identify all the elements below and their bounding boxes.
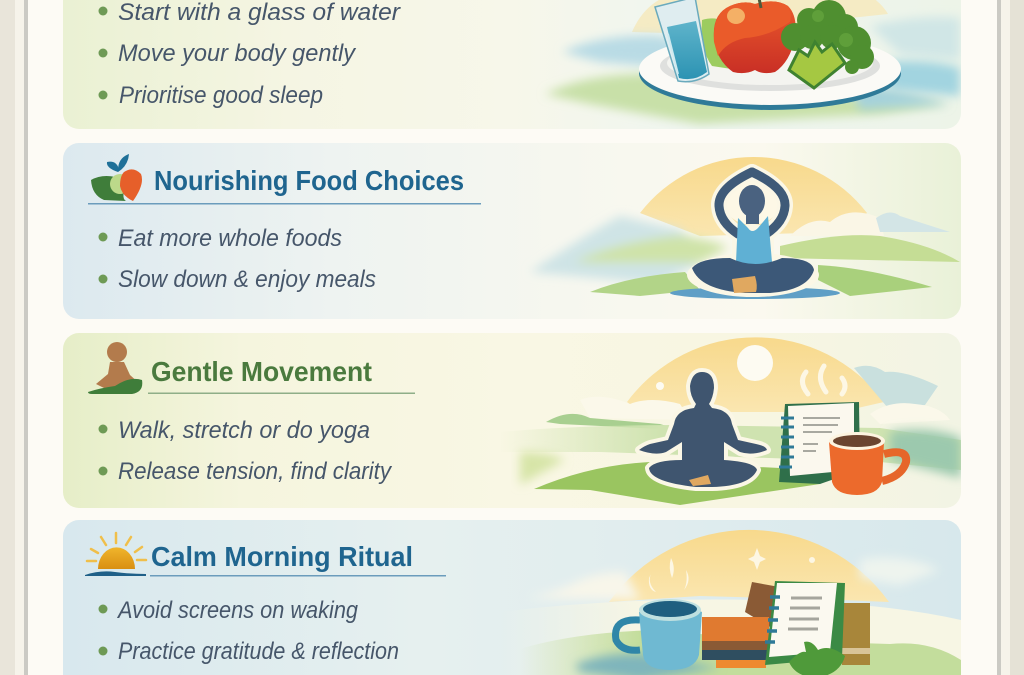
- panel: hydration and morning basics: [63, 0, 961, 129]
- bullet list: Slow down & enjoy meals: [118, 266, 376, 293]
- lettuce: [702, 18, 729, 69]
- bullet list: Avoid screens on waking: [116, 597, 359, 624]
- apple: [714, 0, 796, 73]
- bullet list: Prioritise good sleep: [119, 82, 323, 109]
- books: [702, 582, 870, 668]
- heading: Calm Morning Ritual: [151, 541, 413, 572]
- illustration: seated stretch: [530, 157, 960, 299]
- illustration: meditation with notebook and mug: [500, 337, 961, 505]
- notebook: [779, 402, 860, 484]
- glass of water: [655, 0, 709, 82]
- bullet list: [98, 417, 393, 485]
- illustration: plate with water, apple and broccoli: [545, 0, 960, 124]
- mat: [670, 287, 840, 299]
- bullet list: Move your body gently: [118, 40, 357, 67]
- bullet list: Walk, stretch or do yoga: [118, 417, 370, 444]
- panel: nourishing food choices: [63, 143, 961, 319]
- steam: [802, 366, 845, 394]
- illustration: mug, books and journal: [500, 530, 961, 675]
- bullet list: Practice gratitude & reflection: [118, 638, 399, 665]
- steam: [649, 548, 815, 592]
- panel: gentle movement: [63, 333, 961, 508]
- heading: Gentle Movement: [151, 356, 372, 387]
- notebook: [765, 581, 845, 665]
- bullet list: Eat more whole foods: [118, 225, 342, 252]
- bullet list: [98, 0, 401, 109]
- blue mug: [616, 599, 702, 670]
- panel: calm morning ritual: [63, 520, 961, 675]
- sun disc: [737, 345, 773, 381]
- bullet list: Release tension, find clarity: [118, 458, 393, 485]
- bullet list: [98, 225, 376, 293]
- icon: sunrise over water: [85, 533, 146, 576]
- plate: [639, 46, 901, 110]
- icon: seated person: [88, 342, 142, 394]
- bullet list: [98, 597, 399, 665]
- icon: apple and leaves: [91, 154, 142, 201]
- meditating figure: [639, 372, 767, 487]
- broccoli: [781, 0, 874, 88]
- yoga figure: [687, 172, 819, 297]
- heading: Nourishing Food Choices: [154, 165, 464, 196]
- leaf bowl: [789, 642, 845, 675]
- orange mug: [829, 432, 906, 495]
